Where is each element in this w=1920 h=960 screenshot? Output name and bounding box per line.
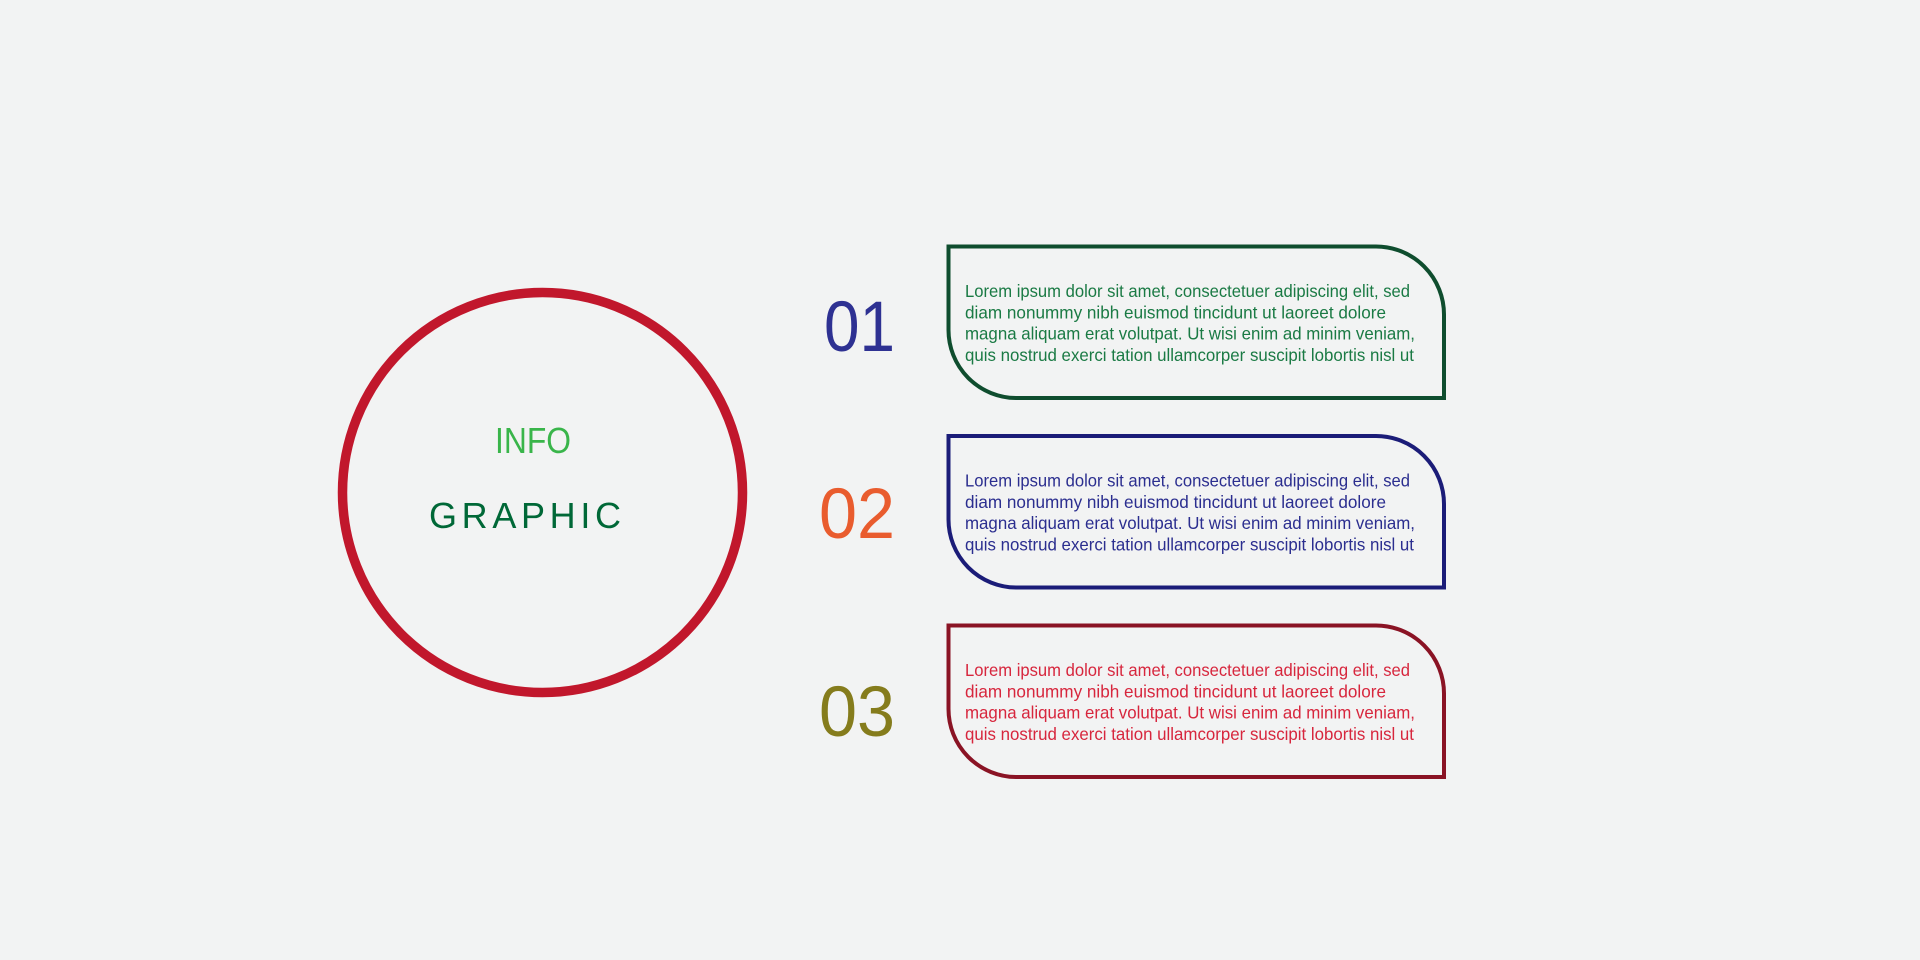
number 01: 01	[824, 288, 895, 367]
panel: text box 1	[948, 246, 1444, 398]
body text 2: magna aliquam erat volutpat. Ut wisi enim ad minim veniam,	[965, 513, 1415, 533]
panel: text box 2	[948, 436, 1444, 588]
circle ring	[342, 292, 742, 692]
panel: central circle	[342, 292, 742, 692]
body text 1: magna aliquam erat volutpat. Ut wisi enim ad minim veniam,	[965, 324, 1415, 344]
body text 2	[965, 470, 1415, 554]
box outline 2	[948, 436, 1444, 588]
heading: INFO: INFO	[495, 420, 571, 461]
box outline 3	[948, 626, 1444, 777]
number 03: 03	[819, 673, 895, 752]
body text 1: diam nonummy nibh euismod tincidunt ut laoreet dolore	[965, 302, 1386, 322]
number 02: 02	[819, 475, 895, 554]
body text 1: quis nostrud exerci tation ullamcorper suscipit lobortis nisl ut	[965, 345, 1414, 365]
body text 3: quis nostrud exerci tation ullamcorper suscipit lobortis nisl ut	[965, 724, 1414, 744]
body text 1: Lorem ipsum dolor sit amet, consectetuer adipiscing elit, sed	[965, 281, 1410, 301]
body text 2: Lorem ipsum dolor sit amet, consectetuer adipiscing elit, sed	[965, 470, 1410, 490]
body text 3: magna aliquam erat volutpat. Ut wisi enim ad minim veniam,	[965, 703, 1415, 723]
body text 2: diam nonummy nibh euismod tincidunt ut laoreet dolore	[965, 492, 1386, 512]
body text 3	[965, 660, 1415, 744]
heading: GRAPHIC: GRAPHIC	[429, 495, 621, 536]
panel: text box 3	[948, 626, 1444, 777]
body text 2: quis nostrud exerci tation ullamcorper suscipit lobortis nisl ut	[965, 534, 1414, 554]
body text 3: Lorem ipsum dolor sit amet, consectetuer adipiscing elit, sed	[965, 660, 1410, 680]
body text 1	[965, 281, 1415, 365]
body text 3: diam nonummy nibh euismod tincidunt ut laoreet dolore	[965, 681, 1386, 701]
box outline 1	[948, 246, 1444, 398]
